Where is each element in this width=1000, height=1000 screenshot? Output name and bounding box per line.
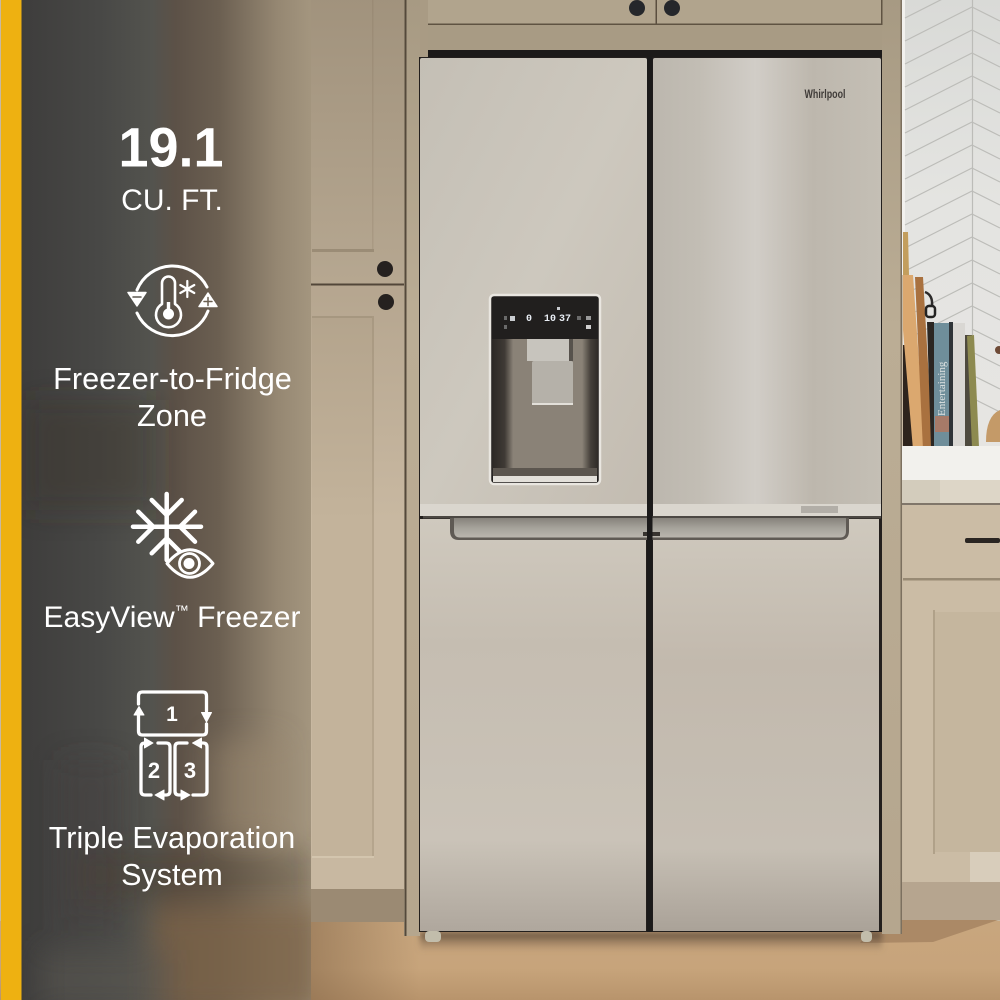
icon: triple evaporation system (134, 692, 212, 800)
dispenser recess (492, 339, 598, 475)
water paddle (532, 361, 573, 405)
lower right door (653, 519, 879, 931)
upper right door (653, 58, 881, 506)
label: EasyView Freezer: ™ (175, 602, 189, 618)
label: Freezer-to-Fridge Zone (53, 361, 292, 433)
door seam (420, 504, 881, 518)
cutting boards and books: Entertaining (936, 361, 948, 416)
icon: snowflake with eye (133, 494, 213, 577)
capacity unit: CU. FT. (121, 184, 223, 217)
icon: triple evaporation system: 2 (148, 758, 160, 783)
right lower cabinets (902, 505, 1000, 920)
fridge surround (404, 0, 902, 936)
capacity value: 19.1 (118, 116, 224, 178)
icon: freezer-to-fridge thermometer cycle (128, 266, 217, 336)
label: Triple Evaporation System (49, 821, 295, 892)
counter top (902, 446, 1000, 505)
icon: cabinet knobs (377, 261, 394, 310)
control display: 0 (526, 314, 532, 325)
lower left cabinet door (310, 286, 405, 922)
brand logo: Whirlpool (804, 89, 846, 101)
control display (504, 307, 591, 329)
control display: 10 (544, 314, 556, 325)
upper left door (420, 58, 647, 506)
label: EasyView Freezer: Freezer (189, 601, 300, 634)
label: EasyView Freezer: EasyView (44, 601, 175, 634)
drip tray (493, 468, 597, 476)
yellow accent bar (1, 0, 22, 1000)
ice chute (527, 339, 569, 361)
freezer handle (450, 518, 849, 540)
control display: 37 (559, 314, 571, 325)
chevron tile wall (902, 0, 1000, 448)
water and ice dispenser (490, 295, 600, 484)
floor (0, 920, 1000, 1000)
label: Triple Evaporation System: Triple Evaporation (49, 821, 295, 855)
top shade over left cabinet (310, 0, 404, 520)
upper left cabinet door (310, 0, 406, 286)
refrigerator (419, 50, 882, 942)
metric: capacity (118, 116, 224, 217)
lower left door (420, 519, 646, 931)
label: Freezer-to-Fridge Zone: Zone (137, 398, 207, 433)
label: Freezer-to-Fridge Zone: Freezer-to-Fridge (53, 361, 292, 396)
icon: triple evaporation system: 3 (184, 758, 196, 783)
top cabinet with handles (428, 0, 882, 25)
feet (425, 931, 872, 942)
cutting boards and books (903, 232, 1000, 450)
label: Triple Evaporation System: System (121, 858, 223, 892)
center door gap (647, 57, 652, 932)
icon: triple evaporation system: 1 (166, 703, 178, 726)
dark gradient overlay panel (21, 0, 321, 1000)
